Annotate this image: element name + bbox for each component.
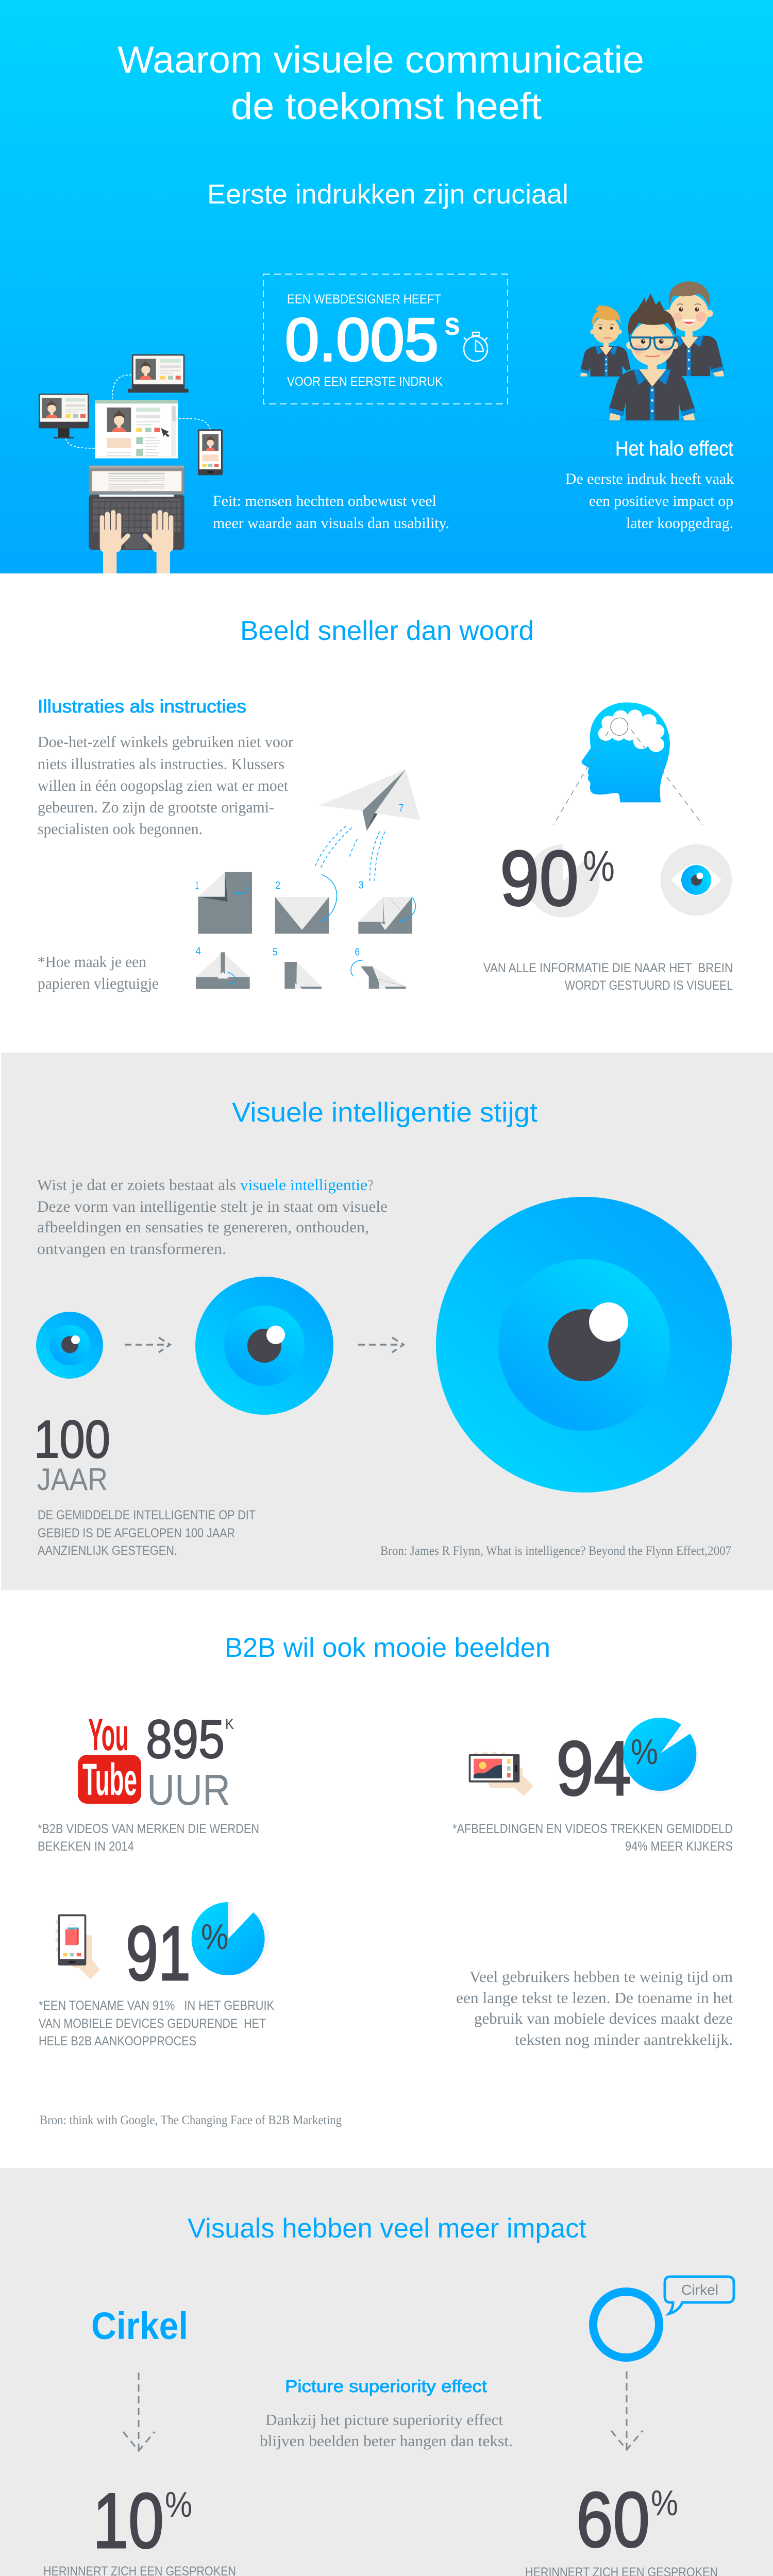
heading: Visuele intelligentie stijgt <box>232 1097 537 1128</box>
heading: Visuals hebben veel meer impact <box>188 2213 586 2244</box>
icon: eye in circle <box>661 844 732 916</box>
icon: laptop with typing hands <box>89 466 184 573</box>
text: illustraties: willen in één oogopslag zien wat er moet <box>38 776 288 794</box>
illustration: three people <box>573 281 734 422</box>
icon: small eye <box>36 1312 103 1379</box>
text: gebruikers: teksten nog minder aantrekkelijk. <box>515 2030 733 2048</box>
logo: youtube: You <box>88 1709 129 1760</box>
text: picture superiority <box>260 2411 513 2450</box>
text: hoe maak je een papieren vliegtuigje <box>38 953 159 992</box>
text: halo uitleg: een positieve impact op <box>589 493 733 510</box>
stat: 895k uur <box>146 1709 234 1814</box>
arrow <box>358 1337 404 1352</box>
text: intro: ontvangen en transformeren. <box>37 1240 226 1258</box>
text: illustraties: specialisten ook begonnen. <box>38 820 203 838</box>
icon: big eye <box>436 1197 732 1493</box>
caption: gemiddelde intelligentie: GEBIED IS DE AFGELOPEN 100 JAAR <box>38 1526 235 1540</box>
panel: visuals impact <box>0 2168 773 2576</box>
stat: 94 percent <box>556 1718 699 1811</box>
icon: laptop small <box>128 354 189 393</box>
text: intro: afbeeldingen en sensaties te genereren, onthouden, <box>37 1218 369 1236</box>
stat: 60 percent: 60 <box>576 2476 650 2564</box>
panel: visuele intelligentie <box>1 1053 773 1590</box>
panel: hero <box>0 0 773 573</box>
callout: 0.005 seconden <box>263 274 508 404</box>
text: intro: ? <box>368 1176 373 1194</box>
subheading: picture superiority effect: Picture superiority effect <box>285 2377 487 2396</box>
subheading: illustraties als instructies: Illustraties als instructies <box>38 697 246 717</box>
step 3: 3 <box>358 879 364 891</box>
step 7: paper plane <box>319 769 421 831</box>
stat: 90 percent: % <box>583 842 615 890</box>
dashed lines <box>553 730 703 825</box>
callout: 0.005 seconden: 0.005 <box>285 306 439 374</box>
text: gebruikers <box>456 1968 733 2048</box>
stat: 91 percent: % <box>201 1917 228 1957</box>
figure: man front with glasses <box>609 294 696 420</box>
word: cirkel: Cirkel <box>91 2304 188 2347</box>
step 6: 6 <box>355 946 360 958</box>
heading: Beeld sneller dan woord <box>240 616 534 646</box>
icon: desktop monitor <box>39 394 89 438</box>
caption: afbeeldingen: 94% MEER KIJKERS <box>625 1839 733 1854</box>
icon: stopwatch <box>464 332 488 361</box>
title <box>117 39 644 127</box>
step 1: 1 <box>195 880 199 891</box>
caption: 90 procent <box>483 961 733 993</box>
stat: 100 jaar: JAAR <box>37 1462 108 1497</box>
icon: hand with tablet <box>469 1752 533 1796</box>
step 3 <box>358 879 415 934</box>
step 4: 4 <box>195 945 201 957</box>
source: Bron: James R Flynn, What is intelligence? Beyond the Flynn Effect,2007 <box>380 1544 731 1558</box>
text: intro <box>37 1176 388 1258</box>
arrow <box>125 1337 170 1352</box>
stat: 91 percent: 91 <box>126 1910 191 1996</box>
stat: 10 percent: % <box>165 2484 192 2524</box>
caption: afbeeldingen <box>452 1822 733 1854</box>
logo: youtube <box>78 1709 141 1805</box>
stat: 90 percent: 90 <box>500 835 579 922</box>
text: halo uitleg: later koopgedrag. <box>626 515 733 532</box>
illustration: devices and laptop with hands <box>39 354 223 573</box>
caption: toename: *EEN TOENAME VAN 91% IN HET GEBRUIK <box>39 1998 274 2013</box>
caption: b2b videos <box>38 1822 259 1854</box>
text: illustraties: gebeuren. Zo zijn de grootste origami- <box>38 798 274 816</box>
callout: 0.005 seconden: VOOR EEN EERSTE INDRUK <box>287 375 443 389</box>
stat: 895k uur: 895 <box>146 1709 225 1770</box>
caption: gemiddelde intelligentie: AANZIENLIJK GESTEGEN. <box>38 1544 177 1558</box>
caption: toename: HELE B2B AANKOOPPROCES <box>39 2034 196 2048</box>
stat: 94 percent: 94 <box>556 1725 631 1811</box>
stat: 91 percent <box>126 1902 270 1996</box>
figure: man back left <box>580 306 631 377</box>
text: picture superiority: Dankzij het picture superiority effect <box>265 2411 503 2429</box>
stat: 60 percent: % <box>651 2483 678 2523</box>
text: gebruikers: een lange tekst te lezen. De toename in het <box>456 1989 733 2007</box>
panel: beeld sneller dan woord <box>0 573 773 1053</box>
title: Waarom visuele communicatie <box>117 39 644 81</box>
arrows: dashed flight paths <box>315 825 385 882</box>
icon: circle with speech bubble <box>593 2277 734 2358</box>
stat: 895k uur: K <box>225 1716 234 1733</box>
text: illustraties: Doe-het-zelf winkels gebruiken niet voor <box>38 733 294 751</box>
text: gebruikers: Veel gebruikers hebben te weinig tijd om <box>469 1968 733 1986</box>
icon: brain cloud <box>598 709 664 752</box>
icon: phone <box>198 429 223 475</box>
text: illustraties <box>38 733 294 838</box>
icon: hand with phone <box>55 1914 100 1979</box>
logo: youtube: Tube <box>82 1755 137 1805</box>
text: feit <box>213 493 449 532</box>
step 5 <box>273 946 322 989</box>
text: halo uitleg: De eerste indruk heeft vaak <box>565 470 734 487</box>
step 5: 5 <box>273 946 278 958</box>
text: feit: Feit: mensen hechten onbewust veel <box>213 493 436 510</box>
stat: 10 percent: 10 <box>93 2477 164 2565</box>
caption: gemiddelde intelligentie <box>38 1508 256 1558</box>
stat: 94 percent: % <box>631 1732 658 1772</box>
caption: toename <box>39 1998 274 2048</box>
callout: 0.005 seconden: EEN WEBDESIGNER HEEFT <box>287 292 441 307</box>
caption: b2b videos: *B2B VIDEOS VAN MERKEN DIE WERDEN <box>38 1822 259 1836</box>
step 2: 2 <box>275 880 280 891</box>
text: intro: Deze vorm van intelligentie stelt je in staat om visuele <box>37 1197 388 1215</box>
text: halo uitleg <box>565 470 734 532</box>
stat: 895k uur: UUR <box>147 1766 230 1814</box>
heading: eerste indrukken: Eerste indrukken zijn cruciaal <box>207 179 568 210</box>
text: picture superiority: blijven beelden beter hangen dan tekst. <box>260 2432 513 2450</box>
text: gebruikers: gebruik van mobiele devices maakt deze <box>474 2009 733 2027</box>
illustration: origami steps <box>195 769 421 989</box>
heading: B2B wil ook mooie beelden <box>225 1633 550 1663</box>
caption: afbeeldingen: *AFBEELDINGEN EN VIDEOS TREKKEN GEMIDDELD <box>452 1822 733 1836</box>
stat: 100 jaar <box>34 1410 110 1497</box>
step 7: paper plane: 7 <box>399 803 404 814</box>
text: hoe maak je een papieren vliegtuigje: papieren vliegtuigje <box>38 974 159 992</box>
callout: 0.005 seconden: s <box>444 307 460 342</box>
text: hoe maak je een papieren vliegtuigje: *Hoe maak je een <box>38 953 146 971</box>
icon: browser window <box>95 400 178 459</box>
text: intro: Wist je dat er zoiets bestaat als <box>37 1176 236 1194</box>
caption: b2b videos: BEKEKEN IN 2014 <box>38 1839 134 1854</box>
source: Bron: think with Google, The Changing Face of B2B Marketing <box>40 2113 342 2127</box>
heading: het halo effect: Het halo effect <box>615 437 733 460</box>
figure: man back right <box>665 281 724 377</box>
icon: head silhouette <box>582 702 670 802</box>
arrow: left down <box>123 2372 155 2451</box>
stat: 100 jaar: 100 <box>34 1410 110 1469</box>
arrow: right down <box>611 2371 643 2450</box>
icon: medium eye <box>195 1277 333 1415</box>
text: intro: visuele intelligentie <box>240 1176 367 1194</box>
title: de toekomst heeft <box>231 86 542 127</box>
panel: b2b <box>0 1590 773 2168</box>
step 2 <box>275 874 337 934</box>
caption: gemiddelde intelligentie: DE GEMIDDELDE INTELLIGENTIE OP DIT <box>38 1508 256 1522</box>
caption: 90 procent: WORDT GESTUURD IS VISUEEL <box>565 978 733 993</box>
illustration: head with brain <box>553 702 703 825</box>
icon: circle with speech bubble: Cirkel <box>681 2282 718 2298</box>
caption: toename: VAN MOBIELE DEVICES GEDURENDE HET <box>39 2016 266 2031</box>
step 1 <box>195 872 252 934</box>
step 6 <box>351 946 406 989</box>
caption: 90 procent: VAN ALLE INFORMATIE DIE NAAR HET BREIN <box>483 961 733 975</box>
text: feit: meer waarde aan visuals dan usability. <box>213 515 449 532</box>
step 4 <box>195 945 250 989</box>
text: illustraties: niets illustraties als instructies. Klussers <box>38 755 284 773</box>
